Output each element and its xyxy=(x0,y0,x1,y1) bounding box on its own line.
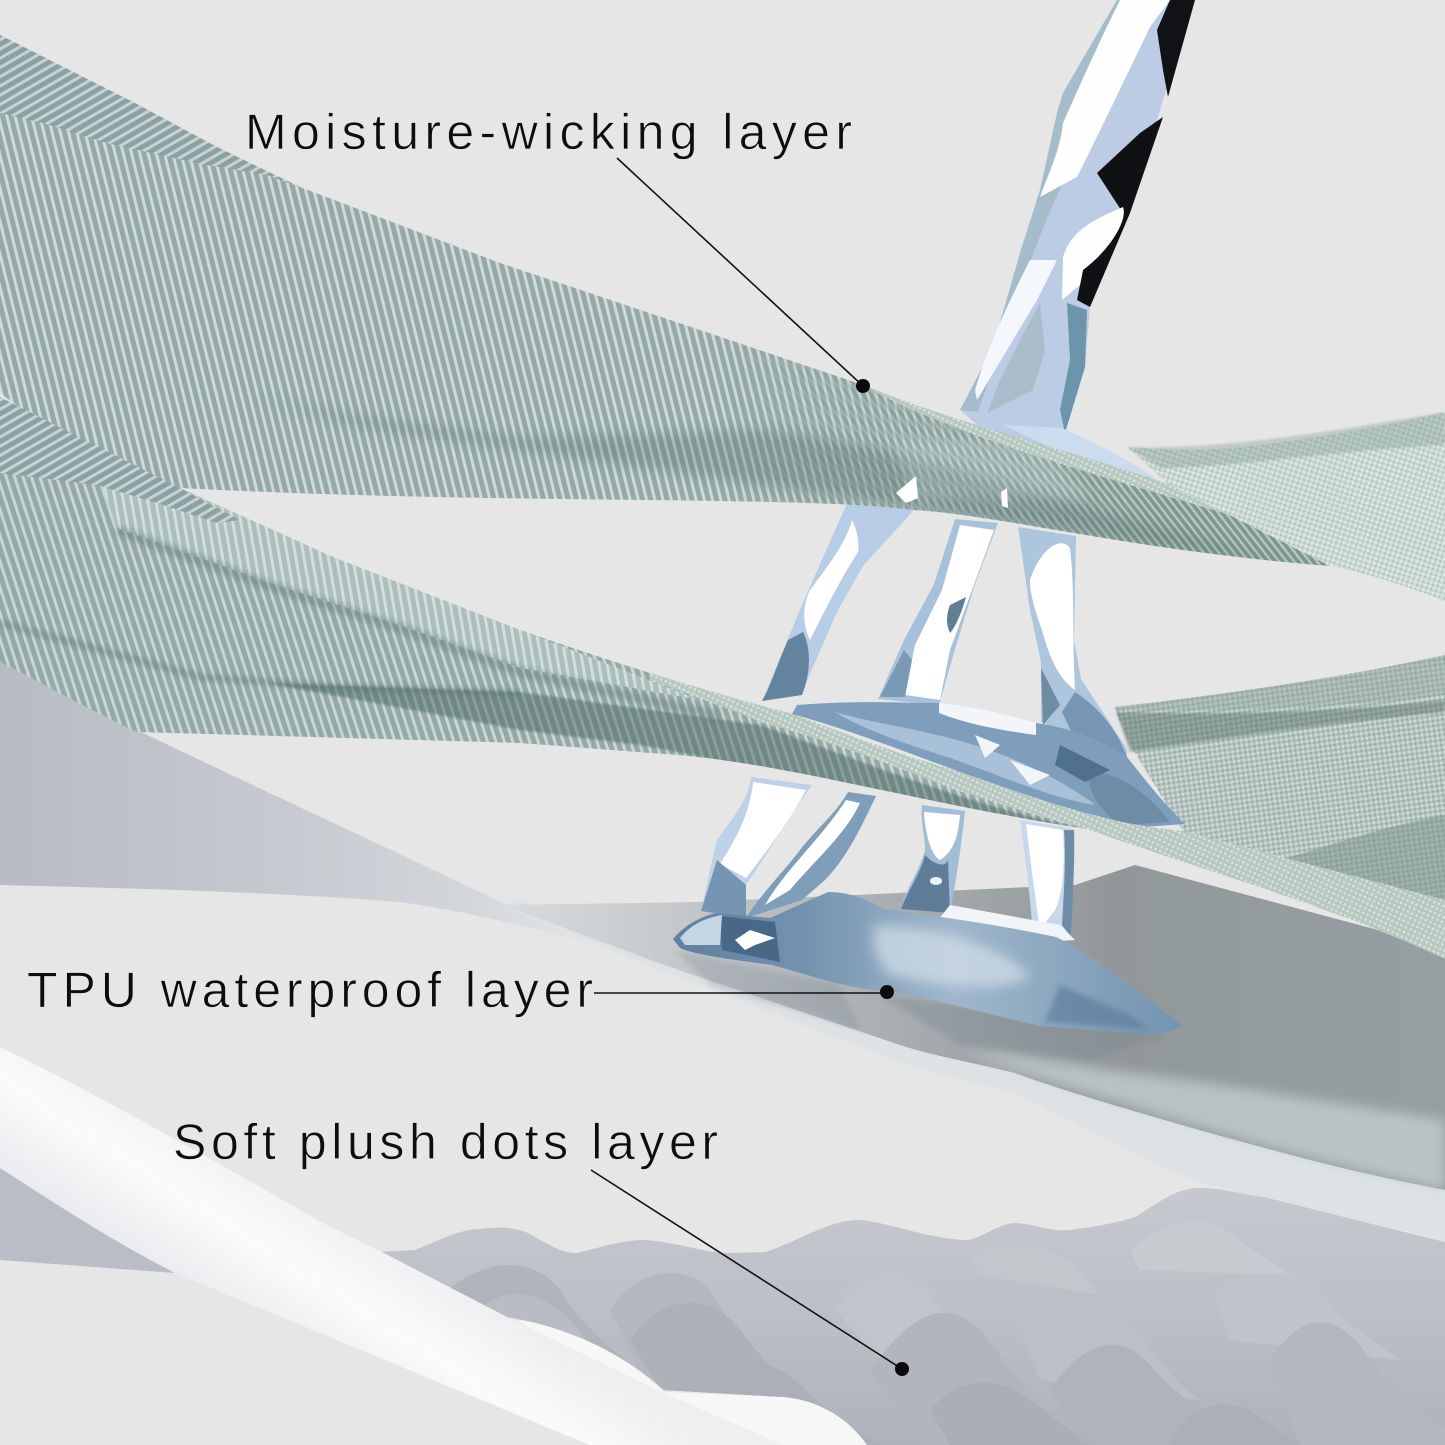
teal edge xyxy=(1060,303,1087,433)
upper fold shadow xyxy=(117,530,720,716)
TPU underside shading xyxy=(0,662,587,943)
panel: white tube edge xyxy=(0,1047,784,1445)
leader line xyxy=(594,992,887,994)
panel: back mesh fabric xyxy=(1114,412,1445,900)
TPU top surface xyxy=(503,865,1445,1190)
panel: moisture-wicking layer xyxy=(0,30,1445,959)
water splash xyxy=(896,476,918,503)
TPU light edge strip xyxy=(500,900,1445,1241)
translucent water seen through fabric xyxy=(890,440,1090,500)
lower left leg xyxy=(701,777,812,918)
leader line xyxy=(617,158,863,386)
fold shadow xyxy=(284,402,1272,560)
middle water pool xyxy=(792,702,1185,829)
panel: water stream xyxy=(673,0,1195,1035)
white pillow backing xyxy=(517,1320,867,1445)
upper mesh tone xyxy=(1114,655,1445,710)
plush dots surface xyxy=(378,1188,1445,1445)
upper stream xyxy=(960,0,1195,490)
TPU surface fade xyxy=(960,1050,1445,1190)
lower fold shadow xyxy=(0,623,520,693)
grey shadow wedge xyxy=(0,1168,175,1273)
white lower highlight xyxy=(1062,207,1124,300)
water reflection xyxy=(675,950,1170,1060)
lower third leg xyxy=(901,805,965,913)
white highlight xyxy=(1040,0,1170,197)
chevron fold xyxy=(0,30,300,187)
upper middle leg xyxy=(878,519,998,705)
light fabric strip xyxy=(650,673,1445,959)
label: TPU waterproof layer: TPU waterproof layer xyxy=(27,962,593,1018)
marker dot xyxy=(880,985,894,999)
lower second leg xyxy=(746,792,876,918)
label: soft plush dots layer: Soft plush dots layer xyxy=(173,1114,718,1170)
dark wedge xyxy=(267,683,1087,829)
base water puddle xyxy=(673,892,1183,1035)
lower mesh shadow xyxy=(1275,815,1445,900)
panel: TPU waterproof layer xyxy=(0,662,1445,1241)
lower right mesh band xyxy=(1114,655,1445,900)
grey hatch xyxy=(987,303,1045,413)
lighter upper panel xyxy=(100,478,700,700)
lower fabric band xyxy=(0,397,1445,959)
callout: TPU waterproof layer xyxy=(27,962,894,1018)
panel: soft plush dots layer xyxy=(378,1188,1445,1445)
upper right mesh band xyxy=(1127,412,1445,601)
water foot xyxy=(1003,425,1170,490)
lower fourth leg xyxy=(1020,820,1074,937)
upper left leg xyxy=(762,501,914,701)
lower mesh dark streak xyxy=(1116,700,1445,752)
marker dot xyxy=(856,379,870,393)
black reflection centre xyxy=(1077,117,1163,307)
marker dot xyxy=(895,1362,909,1376)
darker weave xyxy=(764,356,1330,566)
callout: moisture-wicking layer xyxy=(245,104,870,393)
upper right leg xyxy=(1018,527,1127,760)
label: moisture-wicking layer: Moisture-wicking layer xyxy=(245,104,852,160)
upper mesh shading xyxy=(1127,412,1445,468)
black reflection top xyxy=(1157,0,1195,97)
main upper fabric band xyxy=(0,30,1380,570)
white tube xyxy=(0,1047,784,1445)
callout: soft plush dots layer xyxy=(173,1114,909,1376)
lower chevron fold xyxy=(0,397,240,523)
light top edge xyxy=(863,385,1230,515)
plush mounds xyxy=(452,1265,1398,1445)
leader line xyxy=(591,1170,902,1369)
